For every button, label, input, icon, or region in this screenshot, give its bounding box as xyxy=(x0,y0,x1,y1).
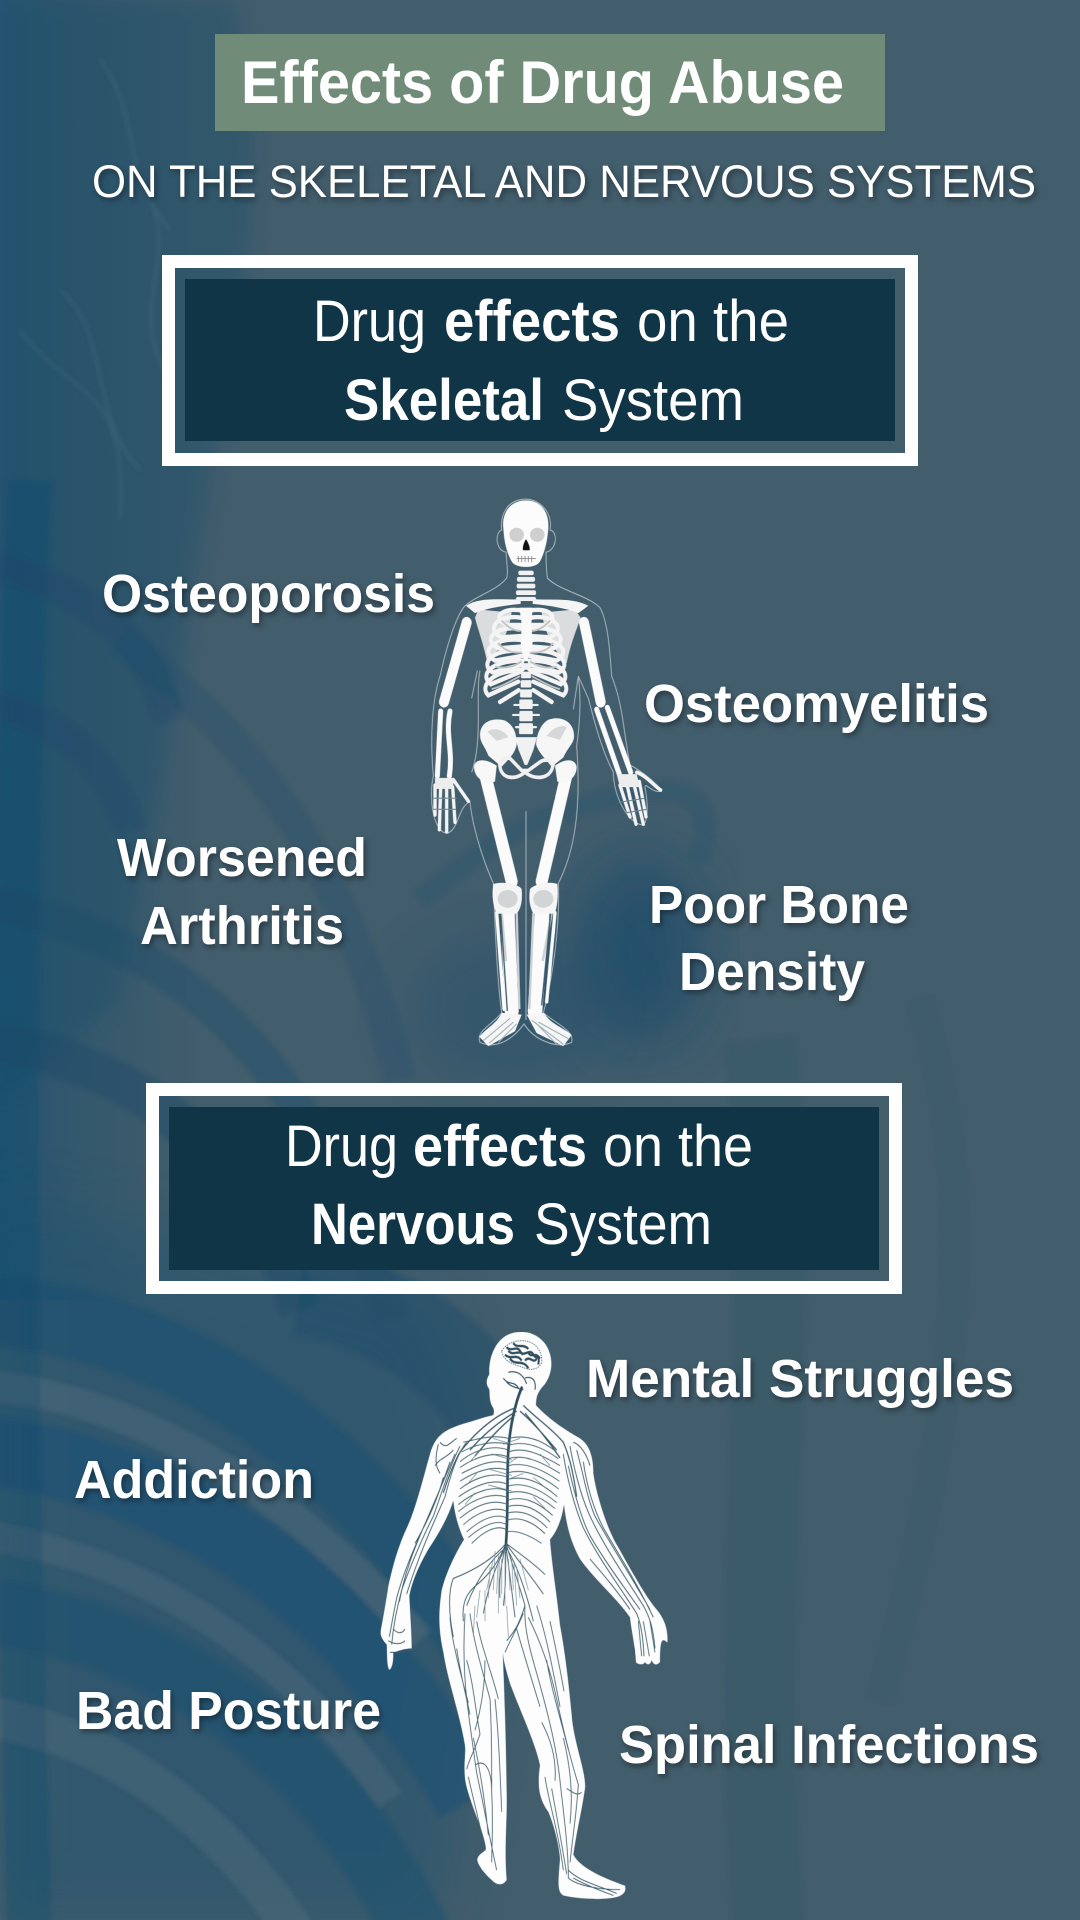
brain xyxy=(502,1341,542,1390)
body silhouette xyxy=(381,1332,667,1899)
subtitle: ON THE SKELETAL AND NERVOUS SYSTEMS xyxy=(92,156,1036,207)
pelvic plexus xyxy=(450,1543,545,1641)
panel: skeletal system heading: System xyxy=(562,368,744,433)
rib gray detail xyxy=(492,621,560,689)
panel: skeletal system heading: effects xyxy=(444,289,620,354)
neck and spine xyxy=(512,571,540,765)
label: Poor Bone Density: Density xyxy=(679,942,865,1002)
label: Addiction: Addiction xyxy=(74,1450,314,1510)
spinal cord xyxy=(506,1388,522,1543)
long bones xyxy=(437,622,631,1011)
title banner xyxy=(215,34,885,131)
label: Osteomyelitis: Osteomyelitis xyxy=(644,674,989,734)
panel: skeletal system heading: Drug xyxy=(313,289,426,354)
panel: nervous system heading: effects xyxy=(413,1114,587,1179)
label: Osteoporosis: Osteoporosis xyxy=(102,564,435,624)
scapulae xyxy=(475,610,581,663)
label: Worsened Arthritis xyxy=(117,828,367,956)
clavicles xyxy=(466,599,588,613)
leg nerves xyxy=(450,1613,502,1870)
panel: nervous system heading: Drug xyxy=(285,1114,398,1179)
skeleton illustration xyxy=(431,499,662,1046)
panel: nervous system heading: System xyxy=(534,1192,712,1257)
ribs xyxy=(485,610,566,702)
arm nerves xyxy=(389,1438,467,1645)
panel: nervous system heading: Nervous xyxy=(311,1192,515,1257)
panel: skeletal system heading: Skeletal xyxy=(344,368,544,433)
knees xyxy=(493,883,558,914)
skull xyxy=(503,500,548,567)
label: Worsened Arthritis: Arthritis xyxy=(140,896,344,956)
label: Poor Bone Density: Poor Bone xyxy=(649,875,909,935)
pelvis xyxy=(480,718,574,767)
hands xyxy=(435,772,661,832)
panel: nervous system heading xyxy=(152,1090,896,1288)
label: Worsened Arthritis: Worsened xyxy=(117,828,367,888)
femoral heads xyxy=(474,760,577,783)
feet xyxy=(479,1013,572,1046)
torso nerves xyxy=(458,1437,560,1543)
bone detail xyxy=(502,913,552,1009)
label: Mental Struggles: Mental Struggles xyxy=(586,1349,1014,1409)
nervous system figure xyxy=(381,1332,667,1899)
title text: Effects of Drug Abuse xyxy=(241,49,844,116)
label: Spinal Infections: Spinal Infections xyxy=(619,1715,1039,1775)
panel: skeletal system heading: on the xyxy=(637,289,789,354)
panel: skeletal system heading xyxy=(168,262,912,460)
label: Poor Bone Density xyxy=(649,875,909,1002)
sternum xyxy=(519,608,533,661)
panel: nervous system heading: on the xyxy=(603,1114,753,1179)
label: Bad Posture: Bad Posture xyxy=(76,1681,381,1741)
body outline xyxy=(431,499,662,1045)
